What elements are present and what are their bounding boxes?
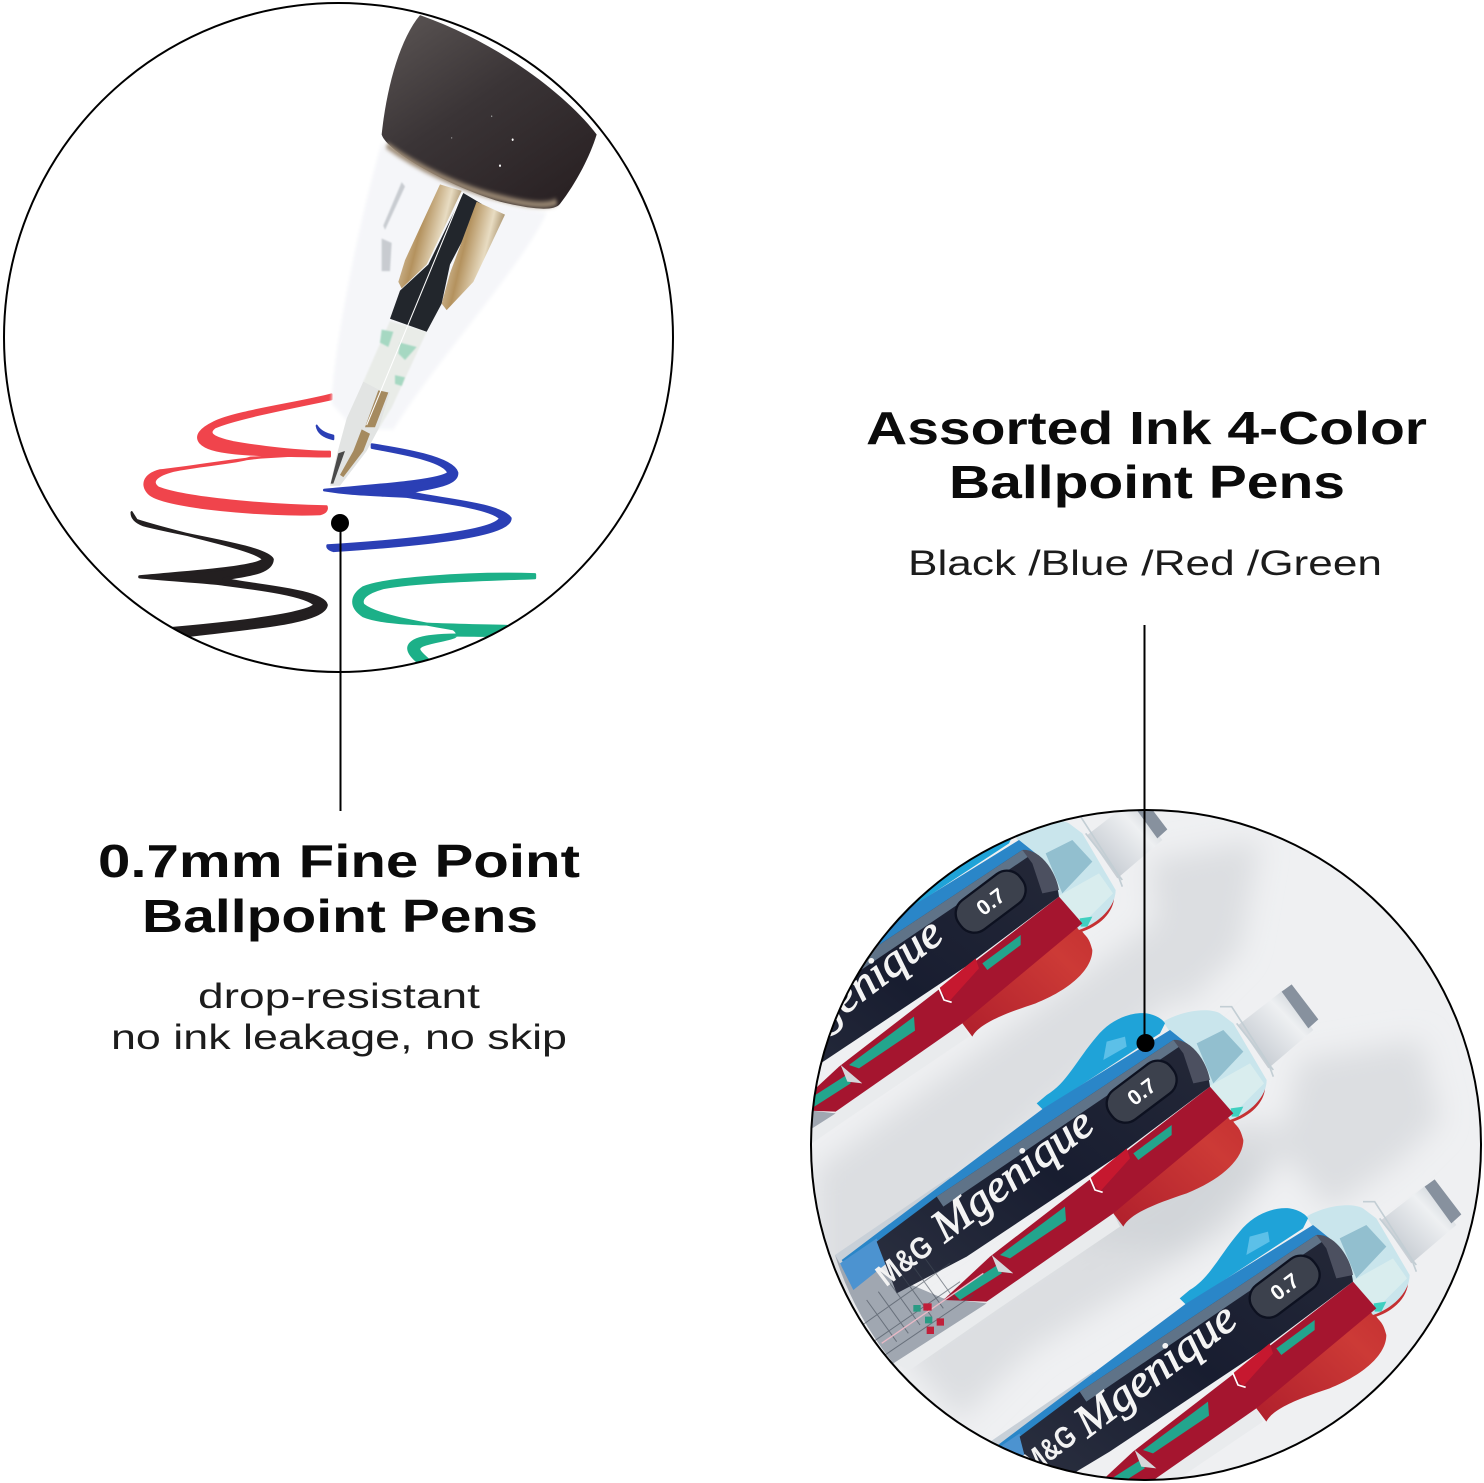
heading: 0.7mm Fine Point Ballpoint Pens [98,835,580,942]
pen: left gold refill tip [398,184,462,288]
pen: upper pen: Mgenique [769,907,952,1062]
size badge: 0.7 [1123,1073,1161,1110]
text block: fine point description: no ink leakage, no skip [111,1018,567,1057]
pen: dark rubber grip [382,15,597,209]
pen: upper pen [812,811,1168,1128]
pen: lower pen [978,1179,1461,1483]
clear dome [1163,1007,1273,1120]
clear barrel end [835,1255,987,1363]
text block: fine point description [111,977,567,1057]
text block: ink colors: Black /Blue /Red /Green [908,544,1382,583]
blue ink section [840,1030,1187,1290]
red ink section [943,1087,1233,1302]
pen: inner refill tube [363,321,427,429]
callout line: fine point [331,514,349,811]
heading: Assorted Ink 4-Color Ballpoint Pens [866,402,1427,508]
size badge [1106,1060,1178,1124]
green ink marks [953,1125,1172,1300]
heading: 0.7mm Fine Point Ballpoint Pens: 0.7mm Fine Point [98,835,580,887]
red clip [1113,1083,1265,1227]
pen: lower pen: M&G [1016,1418,1083,1481]
pen: upper pen: M&G [719,1039,788,1103]
callout line: assorted ink [1136,625,1154,1052]
brand script: Mgenique [920,1097,1103,1252]
pen: black refill [390,193,482,332]
black ink section [877,1040,1210,1293]
pen: right gold refill tip [442,202,505,310]
panel: fine point photo circle [4,3,673,672]
scribble: green ink [353,574,535,664]
pen: cone reflection [382,182,405,271]
barrel top edge [835,1177,957,1267]
text block: fine point description: drop-resistant [198,977,480,1016]
scribble: red ink [144,395,332,514]
pen: transparent cone [332,143,547,429]
heading: Assorted Ink 4-Color Ballpoint Pens: Assorted Ink 4-Color [866,402,1427,454]
pen: metal ballpoint tip [330,191,463,486]
pen: upper pen: 0.7 [972,883,1010,920]
plunger [1238,984,1318,1068]
brand logo: M&G [870,1229,939,1293]
pen: lower pen: Mgenique [1063,1292,1246,1447]
barrel highlight [922,1214,1120,1360]
heading: Assorted Ink 4-Color Ballpoint Pens: Ballpoint Pens [949,456,1345,508]
scribble: blue ink [317,426,511,551]
blue clip [1037,1013,1165,1110]
panel: pens photo circle [810,809,1482,1481]
red refill band [1089,1148,1130,1192]
heading: 0.7mm Fine Point Ballpoint Pens: Ballpoint Pens [142,890,538,942]
pen: green ink marks [380,330,417,386]
scribble: black ink [132,513,327,638]
barrel grip grid [860,1258,983,1355]
pen: lower pen: 0.7 [1266,1268,1304,1305]
refill tip [992,1255,1013,1273]
pen: middle pen [835,984,1318,1370]
